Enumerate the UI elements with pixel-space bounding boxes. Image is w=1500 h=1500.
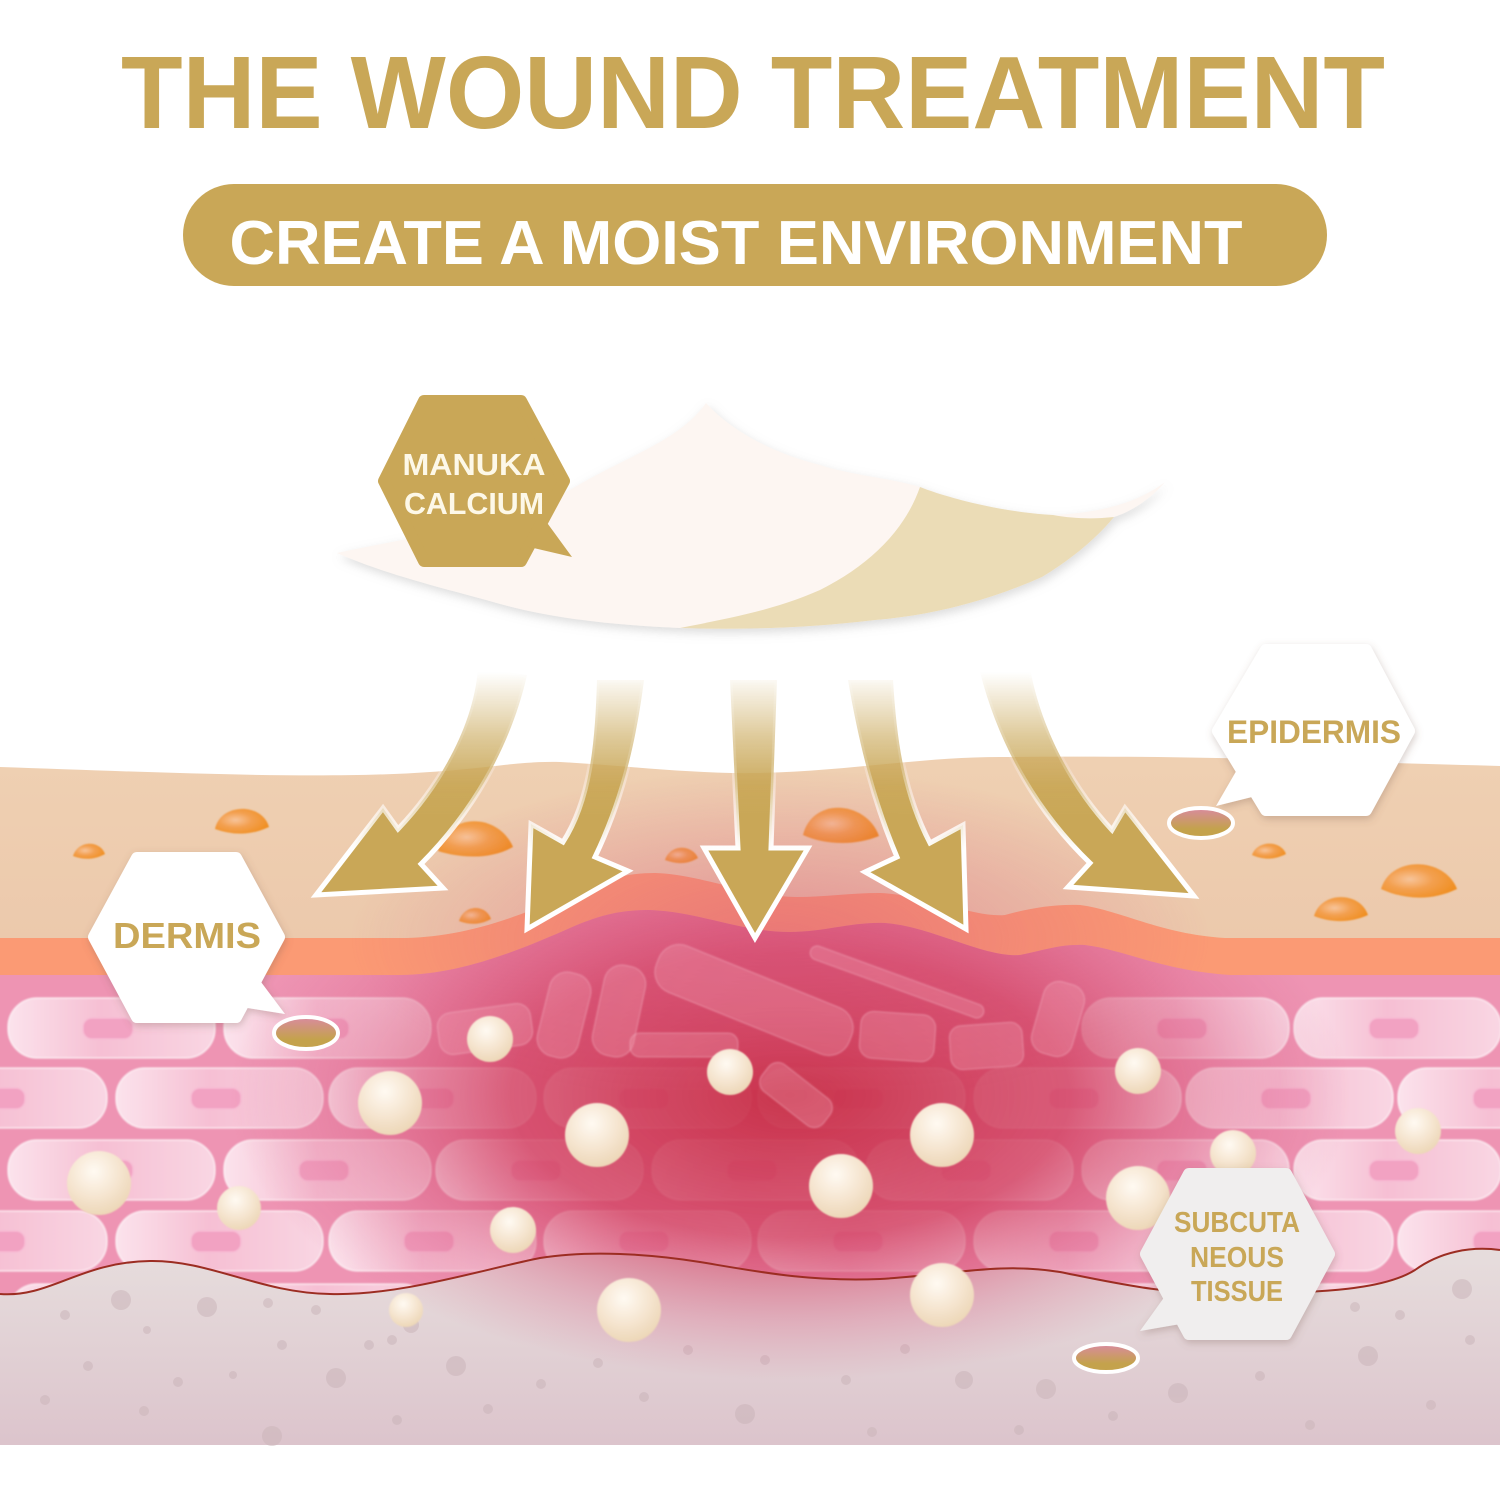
subtitle pill xyxy=(183,184,1327,286)
arrow 2 xyxy=(527,680,644,929)
label: manuka calcium: CALCIUM xyxy=(404,486,544,521)
epidermis layer xyxy=(0,757,1500,990)
arrow 3 xyxy=(704,680,808,938)
label: subcutaneous tissue xyxy=(1074,1174,1329,1372)
label: manuka calcium: MANUKA xyxy=(402,447,546,482)
oil droplets xyxy=(73,808,1457,924)
arrow 4 xyxy=(848,680,966,929)
damaged cells xyxy=(436,938,1088,1132)
membrane curve xyxy=(0,1249,1500,1294)
subcutaneous marker xyxy=(1074,1344,1138,1372)
red wound glow xyxy=(256,910,1322,1366)
label: subcutaneous tissue: NEOUS xyxy=(1190,1242,1284,1274)
subcutaneous dots xyxy=(40,1279,1475,1446)
orange skin layer xyxy=(0,873,1500,1000)
label: subcutaneous tissue: TISSUE xyxy=(1191,1276,1283,1308)
epidermis marker xyxy=(1169,808,1233,838)
healing beads xyxy=(67,1016,1441,1342)
label: epidermis xyxy=(1169,650,1409,838)
manuka callout tail xyxy=(525,520,572,557)
dermis base xyxy=(0,910,1500,1320)
label: subcutaneous tissue: SUBCUTA xyxy=(1174,1207,1300,1239)
arrow 5 xyxy=(980,668,1194,896)
bandage front xyxy=(337,403,1165,629)
subcutaneous tissue layer xyxy=(0,1249,1500,1445)
arrows xyxy=(316,668,1194,938)
arrow 1 xyxy=(316,668,527,895)
label: manuka calcium xyxy=(384,401,572,561)
label: dermis xyxy=(94,858,338,1049)
subtitle pill: CREATE A MOIST ENVIRONMENT xyxy=(230,209,1243,278)
dermis marker xyxy=(274,1017,338,1049)
inflamed upper skin tint xyxy=(406,790,1152,970)
label: epidermis: EPIDERMIS xyxy=(1227,714,1401,750)
panel: skin cross-section xyxy=(0,757,1500,1446)
bandage xyxy=(337,403,1165,629)
bandage folded corner xyxy=(680,487,1114,629)
label: dermis: DERMIS xyxy=(113,915,261,956)
title: THE WOUND TREATMENT xyxy=(121,35,1385,150)
cell rows xyxy=(0,998,1500,1344)
